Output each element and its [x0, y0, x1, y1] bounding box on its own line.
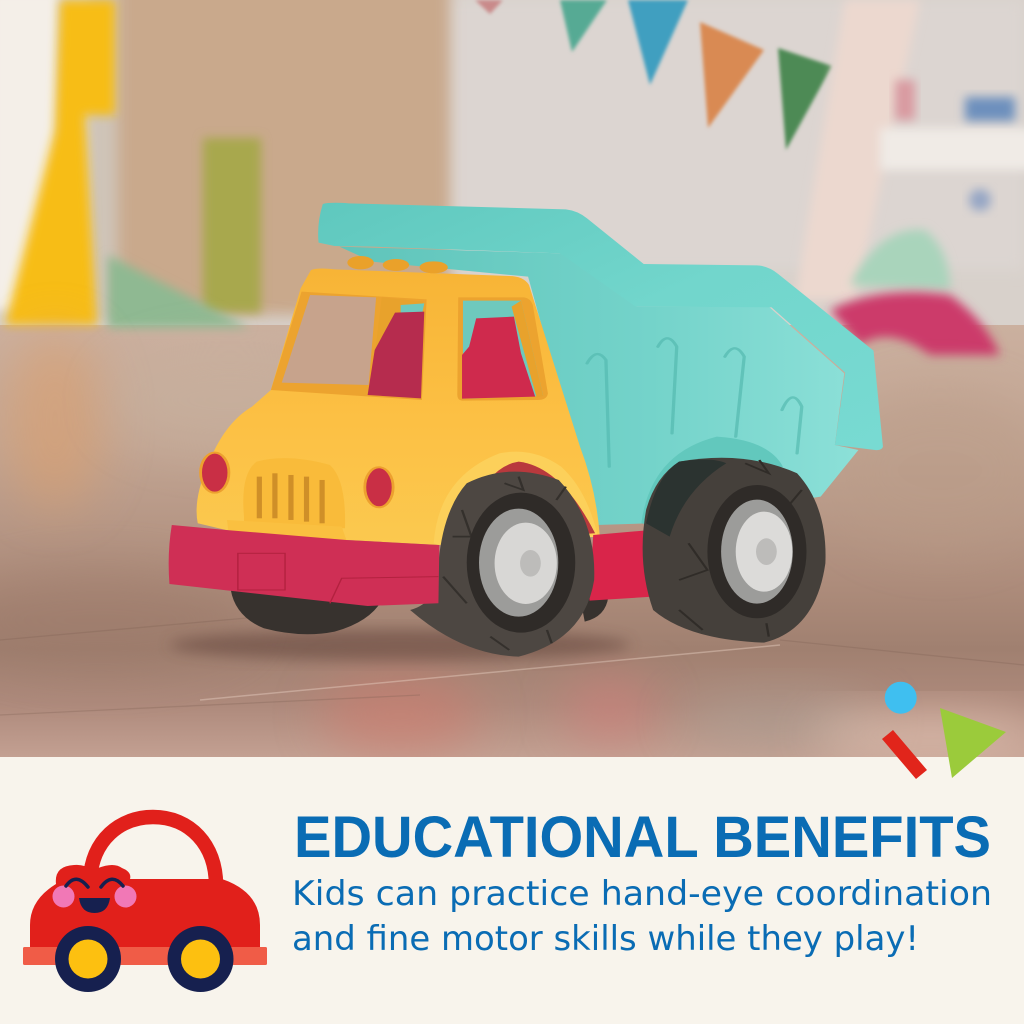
fender highlight: [434, 452, 598, 545]
blurred playroom background: [0, 0, 1024, 757]
tipper ribs: [587, 338, 802, 467]
front bumper: [169, 525, 439, 606]
windshield: [271, 292, 427, 400]
grille: [227, 458, 346, 540]
heading: EDUCATIONAL BENEFITS: [294, 805, 991, 870]
tipper body: [339, 247, 858, 525]
rear chassis: [589, 530, 653, 601]
cab: [197, 268, 600, 545]
wheels: [55, 926, 234, 992]
tipper lid: [318, 203, 883, 450]
side window: [457, 297, 548, 401]
truck: [169, 203, 883, 657]
body text: [292, 874, 992, 959]
face: [52, 879, 136, 913]
photo: toy dump truck on wooden floor: [0, 0, 1024, 757]
headlights: [201, 453, 393, 507]
cab roof ridges: [347, 256, 448, 273]
decorative shapes: circle, bar, triangle: [882, 682, 1006, 779]
hidden front-left wheel: [231, 590, 387, 634]
bottom panel: [0, 757, 1024, 1024]
rear wheel: [643, 458, 826, 643]
body text: Kids can practice hand-eye coordination: [292, 874, 992, 914]
front wheel: [410, 472, 594, 657]
shadow under truck: [170, 629, 630, 661]
car arch: [90, 817, 216, 885]
bumper: [23, 947, 267, 965]
car body: [30, 865, 260, 948]
wheel arch: [641, 437, 783, 527]
body text: and fine motor skills while they play!: [292, 919, 919, 959]
icon: smiling red car: [23, 817, 267, 992]
wooden floor reflections: [0, 330, 1024, 757]
